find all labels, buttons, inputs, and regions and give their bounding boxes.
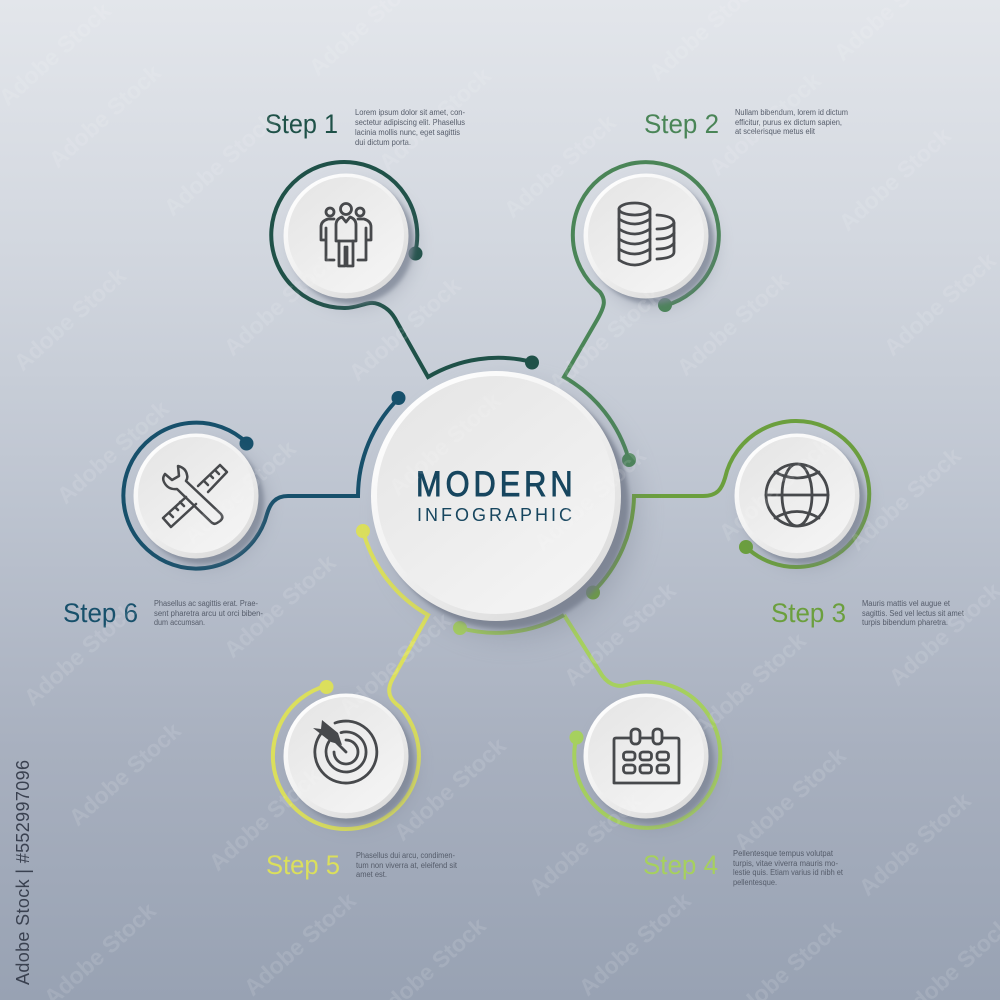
watermark pattern: Adobe Stock bbox=[179, 435, 301, 549]
step 2 text bbox=[735, 108, 848, 136]
icon: globe bbox=[766, 464, 828, 526]
icon: target with arrow bbox=[313, 720, 377, 783]
watermark pattern: Adobe Stock bbox=[499, 109, 621, 223]
step 1 disc bbox=[284, 174, 416, 307]
step 1 connector ring bbox=[271, 162, 539, 377]
step 3 disc bbox=[734, 434, 867, 567]
step 1 text: dui dictum porta. bbox=[355, 138, 411, 147]
step 4 disc bbox=[584, 694, 716, 827]
step 4 text: Pellentesque tempus volutpat bbox=[733, 849, 834, 858]
step 4 heading: Step 4 bbox=[643, 850, 718, 880]
step 3 connector ring bbox=[586, 421, 869, 600]
step 5 text: amet est. bbox=[356, 870, 387, 879]
watermark pattern: Adobe Stock bbox=[672, 267, 794, 381]
icon: coin stacks bbox=[619, 203, 674, 265]
step 6 disc bbox=[134, 434, 266, 567]
step 2 connector ring bbox=[564, 162, 719, 467]
watermark pattern: Adobe Stock bbox=[529, 442, 651, 556]
icon: team of people bbox=[321, 204, 371, 266]
step 5 text: tum non viverra at, eleifend sit bbox=[356, 861, 458, 870]
step 6 text bbox=[154, 599, 263, 627]
step 5 text bbox=[356, 851, 458, 879]
step 5 heading: Step 5 bbox=[266, 850, 340, 880]
step 1 text bbox=[355, 108, 465, 147]
watermark pattern: Adobe Stock bbox=[714, 432, 836, 546]
watermark pattern: Adobe Stock bbox=[374, 62, 496, 176]
watermark pattern: Adobe Stock bbox=[389, 732, 511, 846]
step 6 text: Phasellus ac sagittis erat. Prae- bbox=[154, 599, 258, 608]
step 6 text: sent pharetra arcu ut orci biben- bbox=[154, 609, 263, 618]
watermark pattern: Adobe Stock bbox=[239, 887, 361, 1000]
watermark pattern: Adobe Stock bbox=[559, 577, 681, 691]
panel: step 6 bbox=[63, 391, 406, 628]
step 2 text: Nullam bibendum, lorem id dictum bbox=[735, 108, 848, 117]
step 2 heading: Step 2 bbox=[644, 109, 719, 139]
step 5 text: Phasellus dui arcu, condimen- bbox=[356, 851, 455, 860]
watermark pattern: Adobe Stock bbox=[854, 787, 976, 901]
watermark pattern: Adobe Stock bbox=[204, 762, 326, 876]
step 3 text bbox=[862, 599, 965, 627]
watermark pattern: Adobe Stock bbox=[344, 272, 466, 386]
step 4 text: turpis, vitae viverra mauris mo- bbox=[733, 859, 838, 868]
step 1 text: sectetur adipiscing elit. Phasellus bbox=[355, 118, 465, 127]
step 1 text: Lorem ipsum dolor sit amet, con- bbox=[355, 108, 465, 117]
watermark pattern: Adobe Stock bbox=[219, 549, 341, 663]
step 3 heading: Step 3 bbox=[771, 598, 846, 628]
panel: step 3 bbox=[586, 421, 965, 628]
step 2 text: efficitur, purus ex dictum sapien, bbox=[735, 118, 842, 127]
watermark pattern: Adobe Stock bbox=[64, 717, 186, 831]
step 3 text: sagittis. Sed vel lectus sit amet bbox=[862, 609, 965, 618]
step 6 text: dum accumsan. bbox=[154, 618, 205, 627]
watermark pattern: Adobe Stock bbox=[844, 442, 966, 556]
step 4 text bbox=[733, 849, 844, 887]
panel: step 2 bbox=[564, 108, 848, 467]
watermark pattern: Adobe Stock bbox=[689, 627, 811, 741]
step 3 text: Mauris mattis vel augue et bbox=[862, 599, 951, 608]
hub title: MODERN bbox=[416, 464, 573, 503]
watermark pattern: Adobe Stock bbox=[9, 262, 131, 376]
hub disc bbox=[371, 371, 621, 621]
watermark pattern: Adobe Stock bbox=[219, 247, 341, 361]
step 1 heading: Step 1 bbox=[265, 109, 338, 139]
watermark pattern: Adobe Stock bbox=[334, 607, 456, 721]
step 5 disc bbox=[284, 694, 416, 827]
panel: step 4 bbox=[453, 615, 844, 887]
watermark pattern: Adobe Stock bbox=[159, 107, 281, 221]
watermark pattern: Adobe Stock bbox=[44, 59, 166, 173]
stock id text: Adobe Stock | #552997096 bbox=[13, 760, 33, 985]
step 4 connector ring bbox=[453, 615, 720, 828]
watermark pattern: Adobe Stock bbox=[524, 787, 646, 901]
step 6 heading: Step 6 bbox=[63, 598, 138, 628]
step 4 text: lestie quis. Etiam varius id nibh et bbox=[733, 868, 844, 877]
watermark pattern: Adobe Stock bbox=[19, 597, 141, 711]
step 4 text: pellentesque. bbox=[733, 878, 777, 887]
panel: central hub bbox=[371, 371, 637, 637]
watermark pattern: Adobe Stock bbox=[834, 122, 956, 236]
watermark pattern: Adobe Stock bbox=[879, 247, 1000, 361]
panel: step 1 bbox=[265, 108, 539, 377]
watermark pattern: Adobe Stock bbox=[704, 67, 826, 181]
watermark pattern: Adobe Stock bbox=[384, 387, 506, 501]
icon: calendar bbox=[614, 729, 679, 783]
step 5 connector ring bbox=[273, 524, 428, 829]
watermark pattern: Adobe Stock bbox=[574, 887, 696, 1000]
hub title bbox=[416, 464, 573, 525]
watermark pattern: Adobe Stock bbox=[544, 282, 666, 396]
icon: wrench and ruler bbox=[163, 465, 227, 527]
hub shadow bbox=[379, 379, 637, 637]
watermark pattern: Adobe Stock bbox=[729, 742, 851, 856]
hub title: INFOGRAPHIC bbox=[417, 505, 572, 525]
step 2 text: at scelerisque metus elit bbox=[735, 127, 816, 136]
panel: step 5 bbox=[266, 524, 458, 880]
step 1 text: lacinia mollis nunc, eget sagittis bbox=[355, 128, 460, 137]
watermark pattern: Adobe Stock bbox=[52, 395, 174, 509]
step 2 disc bbox=[584, 174, 716, 307]
step 3 text: turpis bibendum pharetra. bbox=[862, 618, 948, 627]
step 6 connector ring bbox=[123, 391, 406, 569]
